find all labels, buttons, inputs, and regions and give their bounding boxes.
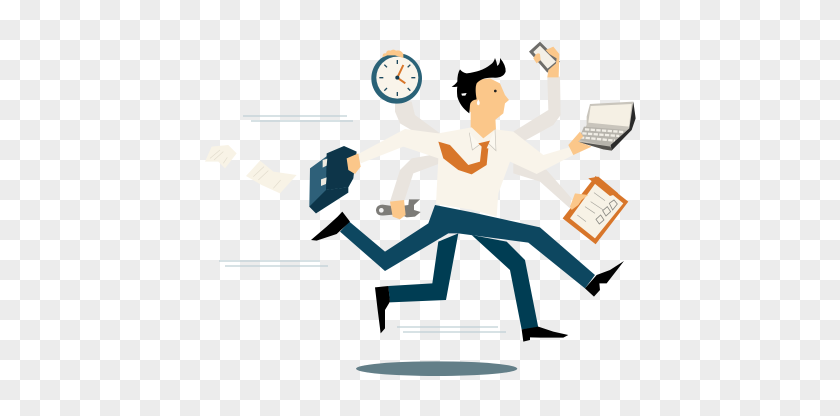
sweat drop and eye [477, 99, 480, 105]
back arms [390, 77, 572, 208]
rear foot [311, 212, 350, 241]
icon: clipboard [563, 176, 628, 244]
neck [471, 110, 496, 142]
icon: briefcase [309, 146, 361, 213]
shoes [375, 286, 390, 333]
icon: laptop [568, 102, 636, 155]
collar [469, 129, 496, 151]
face [468, 78, 509, 120]
flying papers [205, 145, 297, 193]
tie [438, 141, 490, 174]
hand on clipboard [570, 193, 588, 210]
back legs [375, 233, 568, 342]
torso and front arms [358, 127, 573, 217]
shirt and head [358, 58, 573, 217]
front legs [340, 205, 624, 297]
hair [452, 58, 506, 113]
icon: wrench [376, 199, 421, 219]
hand on clock [383, 50, 403, 58]
hand on phone [546, 47, 559, 77]
ground shadow [356, 361, 517, 376]
hand under laptop [568, 132, 592, 155]
speed lines [219, 116, 506, 332]
icon: clock [371, 50, 422, 104]
icon: phone [529, 42, 560, 77]
